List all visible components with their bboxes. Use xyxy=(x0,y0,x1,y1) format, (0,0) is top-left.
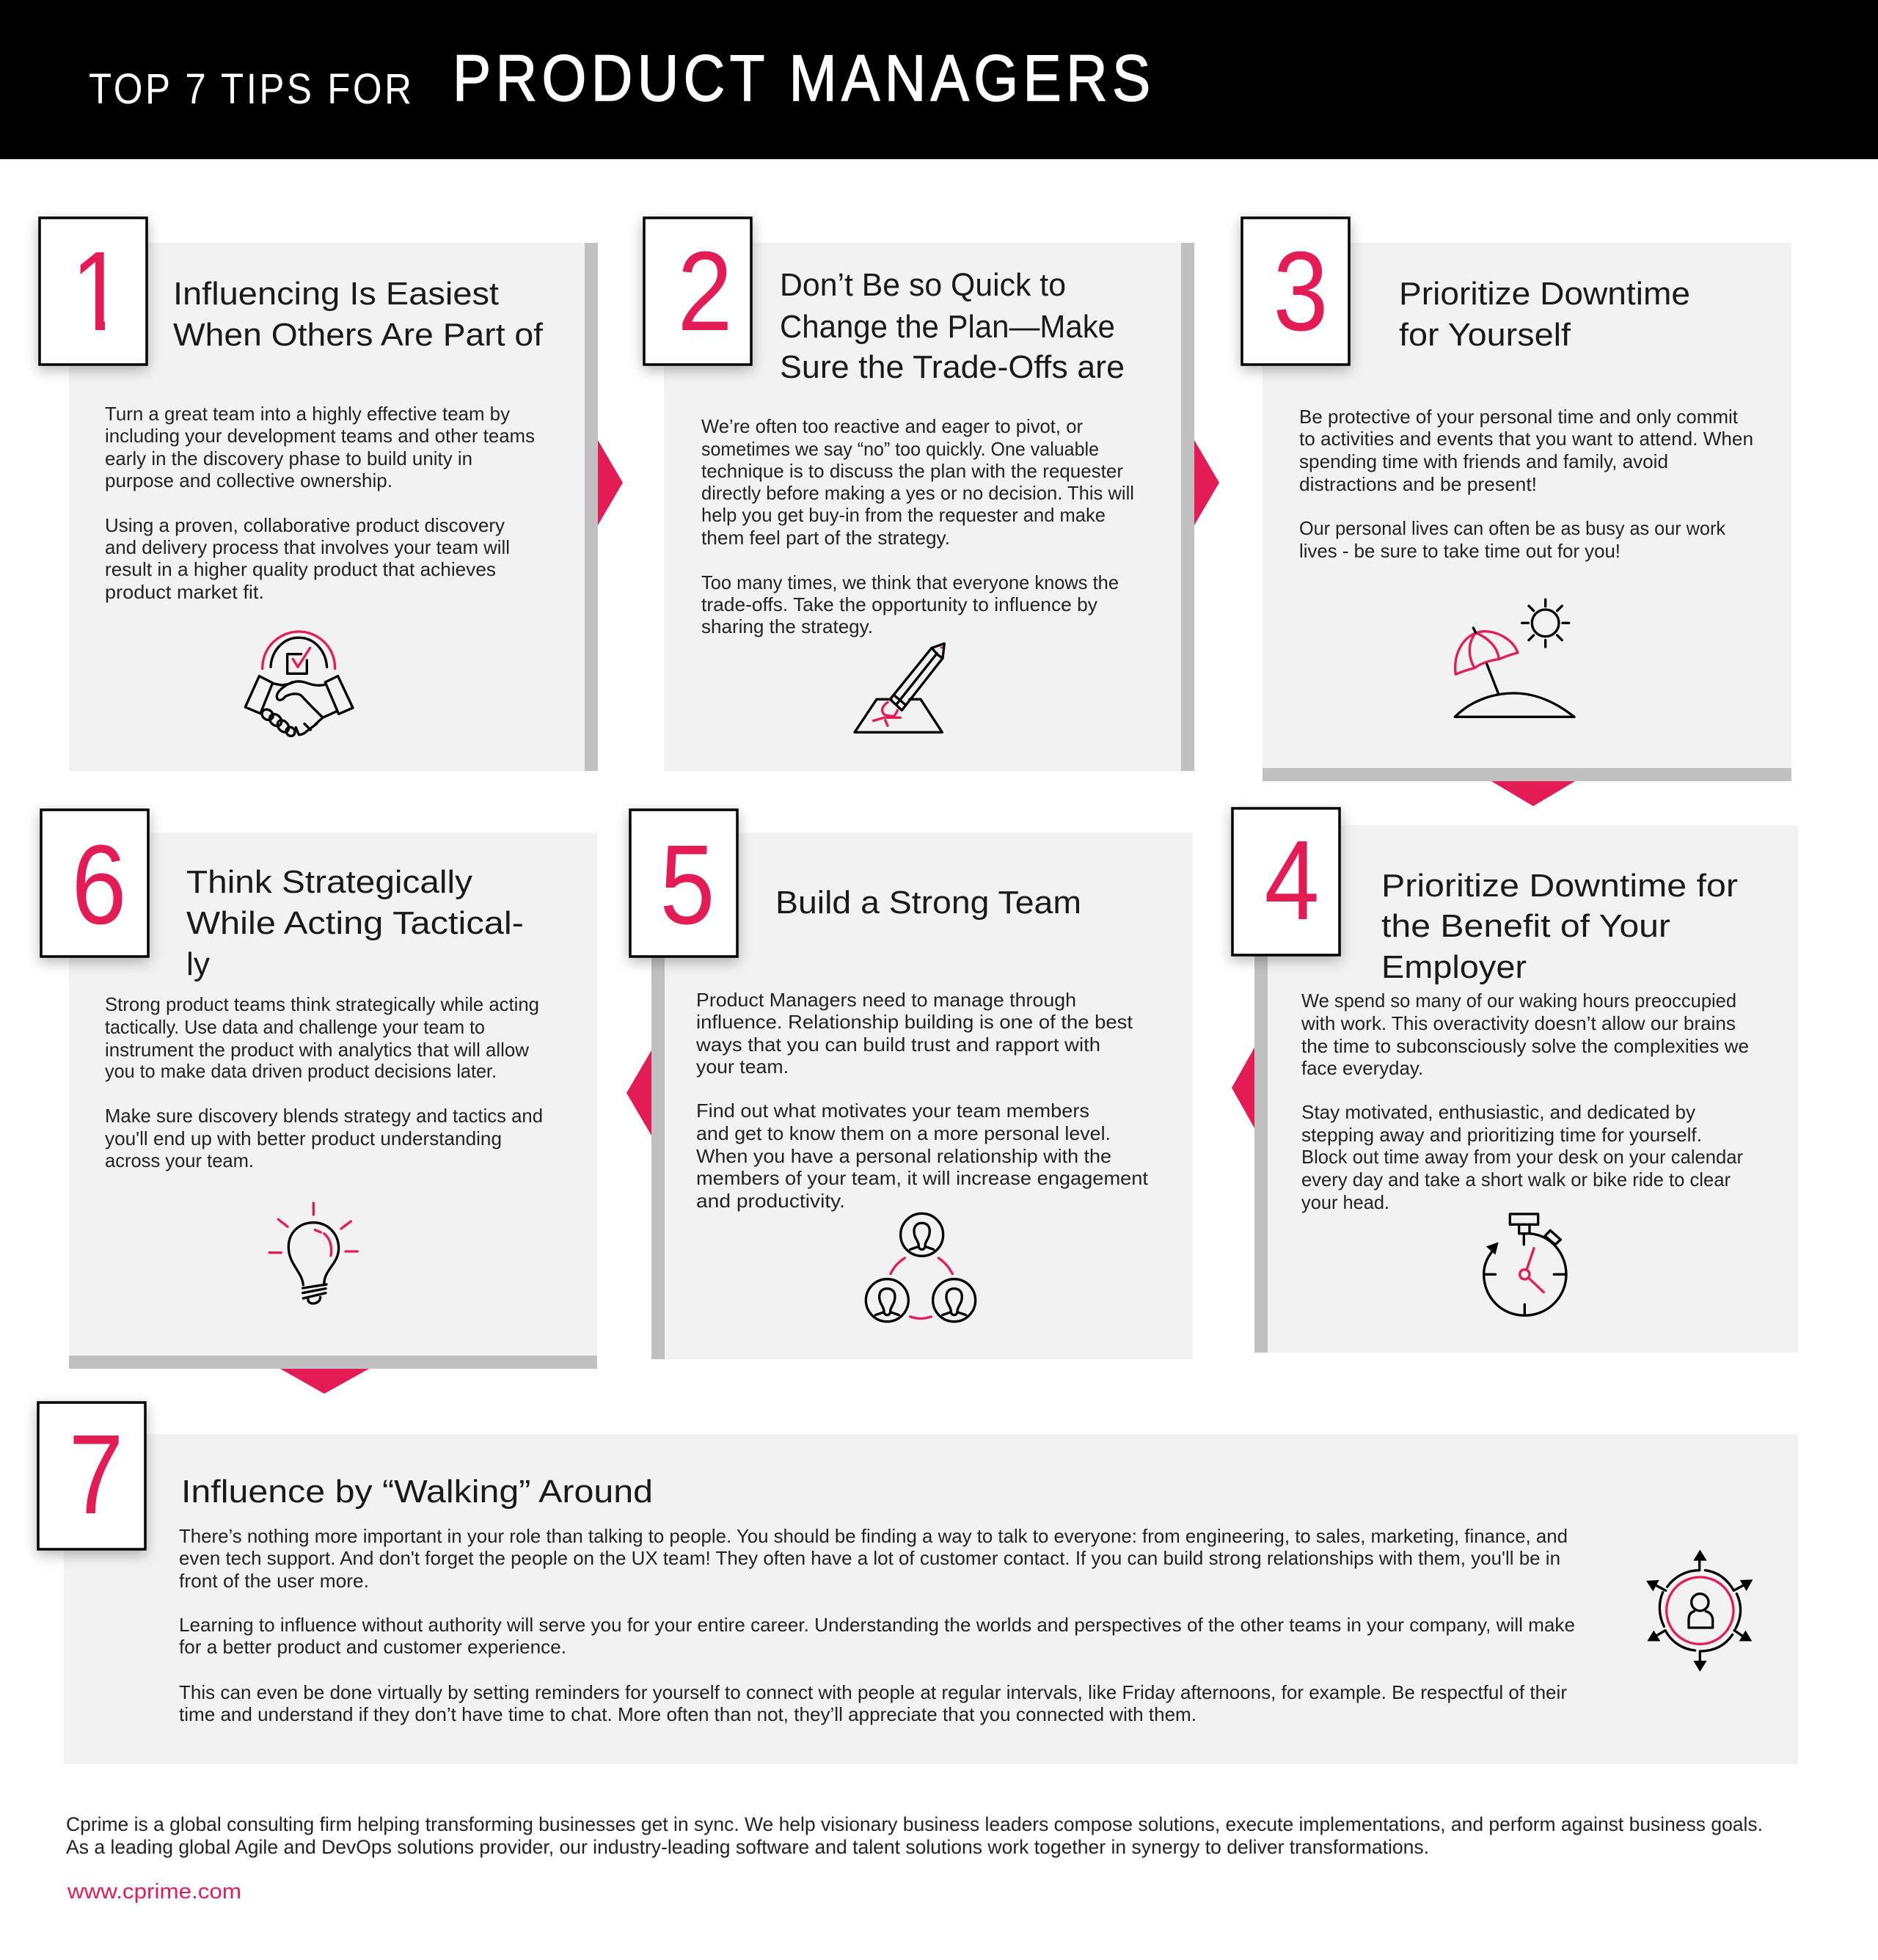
panel: tip 5 xyxy=(630,810,1193,1359)
panel 5 background xyxy=(651,833,1193,1359)
body text 2: sharing the strategy. xyxy=(701,615,873,637)
number box 3 xyxy=(1242,218,1349,365)
body text 3: to activities and events that you want to attend. When xyxy=(1299,428,1753,450)
heading 4: Employer xyxy=(1381,949,1527,985)
heading 2: Sure the Trade-Offs are xyxy=(780,349,1125,385)
body text 6: across your team. xyxy=(105,1149,254,1171)
body text 2: We’re often too reactive and eager to pivot, or xyxy=(701,415,1083,437)
number box 5: 5 xyxy=(660,822,715,948)
body text 6: you'll end up with better product understanding xyxy=(105,1127,502,1149)
heading 3 xyxy=(1399,276,1690,353)
body text 3: lives - be sure to take time out for you! xyxy=(1299,540,1621,562)
arrow: 3 to 4 xyxy=(1491,781,1575,806)
footer text xyxy=(66,1813,1763,1858)
panel 5 side bar xyxy=(651,833,665,1359)
body text 5: influence. Relationship building is one of the best xyxy=(696,1011,1133,1033)
icon: team of three people xyxy=(866,1213,976,1322)
body text 6: Strong product teams think strategically while acting xyxy=(105,993,539,1015)
header banner xyxy=(0,0,1878,159)
icon: stopwatch xyxy=(1484,1214,1566,1315)
panel 2 background xyxy=(664,243,1194,771)
body text 5: and get to know them on a more personal level. xyxy=(696,1122,1111,1144)
arrow: 5 to 6 xyxy=(626,1050,651,1136)
body text 5: your team. xyxy=(696,1056,789,1078)
panel 6 background xyxy=(69,833,597,1369)
footer text: As a leading global Agile and DevOps solutions provider, our industry-leading software and talent solutions work together in synergy to deliver transformations. xyxy=(66,1836,1429,1858)
body text 2: sometimes we say “no” too quickly. One valuable xyxy=(701,438,1099,460)
heading 4: Prioritize Downtime for xyxy=(1381,868,1738,904)
body text 4: with work. This overactivity doesn’t allow our brains xyxy=(1301,1012,1736,1034)
body text 7: for a better product and customer experience. xyxy=(179,1636,566,1658)
body text 5: and productivity. xyxy=(696,1190,845,1212)
body text 3: distractions and be present! xyxy=(1299,473,1537,495)
body text 2 xyxy=(701,415,1134,637)
body text 5 xyxy=(695,989,1149,1212)
body text 1: Using a proven, collaborative product discovery xyxy=(105,514,505,536)
arrow: 2 to 3 xyxy=(1194,440,1219,525)
body text 3: spending time with friends and family, avoid xyxy=(1299,450,1668,472)
panel 1 side bar xyxy=(585,243,598,771)
body text 5: When you have a personal relationship with the xyxy=(696,1145,1111,1167)
icon: person with outward arrows xyxy=(1646,1550,1753,1672)
body text 4: stepping away and prioritizing time for yourself. xyxy=(1301,1124,1702,1146)
heading 6: Think Strategically xyxy=(186,864,472,900)
body text 3: Be protective of your personal time and only commit xyxy=(1299,406,1739,428)
body text 4: face everyday. xyxy=(1301,1057,1423,1079)
panel: tip 6 xyxy=(41,810,597,1369)
body text 6 xyxy=(105,993,543,1171)
panel 3 background xyxy=(1263,243,1791,781)
heading 1: When Others Are Part of xyxy=(173,317,544,353)
body text 4: the time to subconsciously solve the complexities we xyxy=(1301,1035,1749,1057)
heading 4: the Benefit of Your xyxy=(1381,908,1670,944)
number box 7 xyxy=(38,1403,145,1549)
heading 5: Build a Strong Team xyxy=(775,885,1081,921)
heading 4 xyxy=(1381,868,1738,985)
heading 2 xyxy=(780,267,1125,385)
body text 5: Product Managers need to manage through xyxy=(696,989,1076,1011)
body text 4 xyxy=(1301,990,1749,1213)
panel: tip 4 xyxy=(1232,808,1798,1353)
footer text: Cprime is a global consulting firm helping transforming businesses get in sync. We help visionary business leaders compose solutions, execute implementations, and perform against business goals. xyxy=(66,1813,1763,1835)
body text 4: Block out time away from your desk on your calendar xyxy=(1301,1146,1743,1168)
number box 1: 1 xyxy=(71,228,125,354)
number box 1 xyxy=(40,218,147,365)
heading 3: Prioritize Downtime xyxy=(1399,276,1690,312)
body text 1: result in a higher quality product that achieves xyxy=(105,558,496,580)
heading 6: ly xyxy=(186,946,210,982)
number box 5 xyxy=(630,810,737,957)
body text 1 xyxy=(105,403,535,603)
body text 6: you to make data driven product decisions later. xyxy=(105,1060,497,1082)
panel: tip 2 xyxy=(644,218,1194,771)
body text 2: Too many times, we think that everyone knows the xyxy=(701,571,1119,593)
number box 4 xyxy=(1232,808,1340,955)
panel 1 background xyxy=(69,243,598,771)
icon: beach umbrella and sun xyxy=(1455,599,1574,717)
body text 5: members of your team, it will increase engagement xyxy=(696,1167,1149,1189)
body text 5: Find out what motivates your team members xyxy=(696,1100,1089,1122)
body text 5: ways that you can build trust and rapport with xyxy=(695,1034,1100,1056)
body text 6: Make sure discovery blends strategy and tactics and xyxy=(105,1105,543,1127)
heading 6 xyxy=(186,864,524,982)
panel 3 bottom bar xyxy=(1263,768,1791,781)
body text 1: and delivery process that involves your team will xyxy=(105,536,510,558)
panel: tip 7 xyxy=(38,1403,1798,1764)
heading 2: Don’t Be so Quick to xyxy=(780,267,1066,303)
body text 7: even tech support. And don't forget the people on the UX team! They often have a lot of customer contact. If you can build strong relationships with them, you'll be in xyxy=(179,1547,1560,1569)
body text 4: Stay motivated, enthusiastic, and dedicated by xyxy=(1301,1101,1695,1123)
panel 4 background xyxy=(1254,825,1798,1353)
body text 7: front of the user more. xyxy=(179,1570,369,1592)
panel 7 background xyxy=(64,1434,1798,1764)
body text 7: time and understand if they don’t have time to chat. More often than not, they’ll appreciate that you connected with them. xyxy=(179,1703,1196,1725)
body text 2: help you get buy-in from the requester and make xyxy=(701,504,1106,526)
body text 2: them feel part of the strategy. xyxy=(701,527,950,549)
body text 1: early in the discovery phase to build unity in xyxy=(105,447,472,469)
panel 2 side bar xyxy=(1181,243,1194,771)
number box 2 xyxy=(644,218,751,365)
icon: pencil signing paper xyxy=(855,643,944,732)
arrow: 4 to 5 xyxy=(1232,1047,1254,1128)
number box 3: 3 xyxy=(1274,228,1328,354)
body text 3: Our personal lives can often be as busy as our work xyxy=(1299,517,1726,539)
panel: tip 1 xyxy=(40,218,598,771)
number box 7: 7 xyxy=(69,1411,123,1537)
body text 7 xyxy=(179,1525,1575,1725)
heading 2: Change the Plan—Make xyxy=(780,309,1115,345)
icon: handshake with checkbox xyxy=(245,632,353,738)
body text 7: There’s nothing more important in your role than talking to people. You should be finding a way to talk to everyone: from engineering, to sales, marketing, finance, and xyxy=(179,1525,1568,1547)
number box 6: 6 xyxy=(72,822,126,948)
heading 6: While Acting Tactical- xyxy=(186,905,524,941)
website link: www.cprime.com xyxy=(67,1880,241,1904)
number box 4: 4 xyxy=(1265,817,1319,943)
body text 4: We spend so many of our waking hours preoccupied xyxy=(1301,990,1736,1012)
body text 1: product market fit. xyxy=(105,581,264,603)
panel 4 side bar xyxy=(1254,825,1268,1353)
heading 1: Influencing Is Easiest xyxy=(173,276,499,312)
arrow: 1 to 2 xyxy=(598,440,623,525)
body text 1: purpose and collective ownership. xyxy=(105,469,392,491)
title main: PRODUCT MANAGERS xyxy=(453,41,1150,114)
heading 1 xyxy=(173,276,544,353)
body text 2: directly before making a yes or no decision. This will xyxy=(701,482,1134,504)
heading 3: for Yourself xyxy=(1399,317,1571,353)
body text 6: instrument the product with analytics that will allow xyxy=(105,1039,529,1061)
body text 2: technique is to discuss the plan with the requester xyxy=(701,460,1123,482)
heading 7: Influence by “Walking” Around xyxy=(181,1474,653,1510)
number box 6 xyxy=(41,810,148,957)
body text 3 xyxy=(1299,406,1753,562)
panel 6 bottom bar xyxy=(69,1356,597,1369)
number box 2: 2 xyxy=(678,228,732,354)
icon: light bulb xyxy=(269,1203,357,1303)
body text 4: every day and take a short walk or bike ride to clear xyxy=(1301,1169,1731,1191)
arrow: 6 to 7 xyxy=(280,1369,369,1394)
body text 2: trade-offs. Take the opportunity to influence by xyxy=(701,593,1097,615)
body text 6: tactically. Use data and challenge your team to xyxy=(105,1016,485,1038)
body text 1: Turn a great team into a highly effective team by xyxy=(105,403,510,425)
body text 7: Learning to influence without authority will serve you for your entire career. Understanding the worlds and perspectives of the other teams in your company, will make xyxy=(179,1614,1575,1636)
panel: tip 3 xyxy=(1242,218,1791,781)
body text 1: including your development teams and other teams xyxy=(105,425,535,447)
body text 7: This can even be done virtually by setting reminders for yourself to connect with people at regular intervals, like Friday afternoons, for example. Be respectful of their xyxy=(179,1681,1567,1703)
body text 4: your head. xyxy=(1301,1191,1389,1213)
title prefix: TOP 7 TIPS FOR xyxy=(89,65,412,113)
